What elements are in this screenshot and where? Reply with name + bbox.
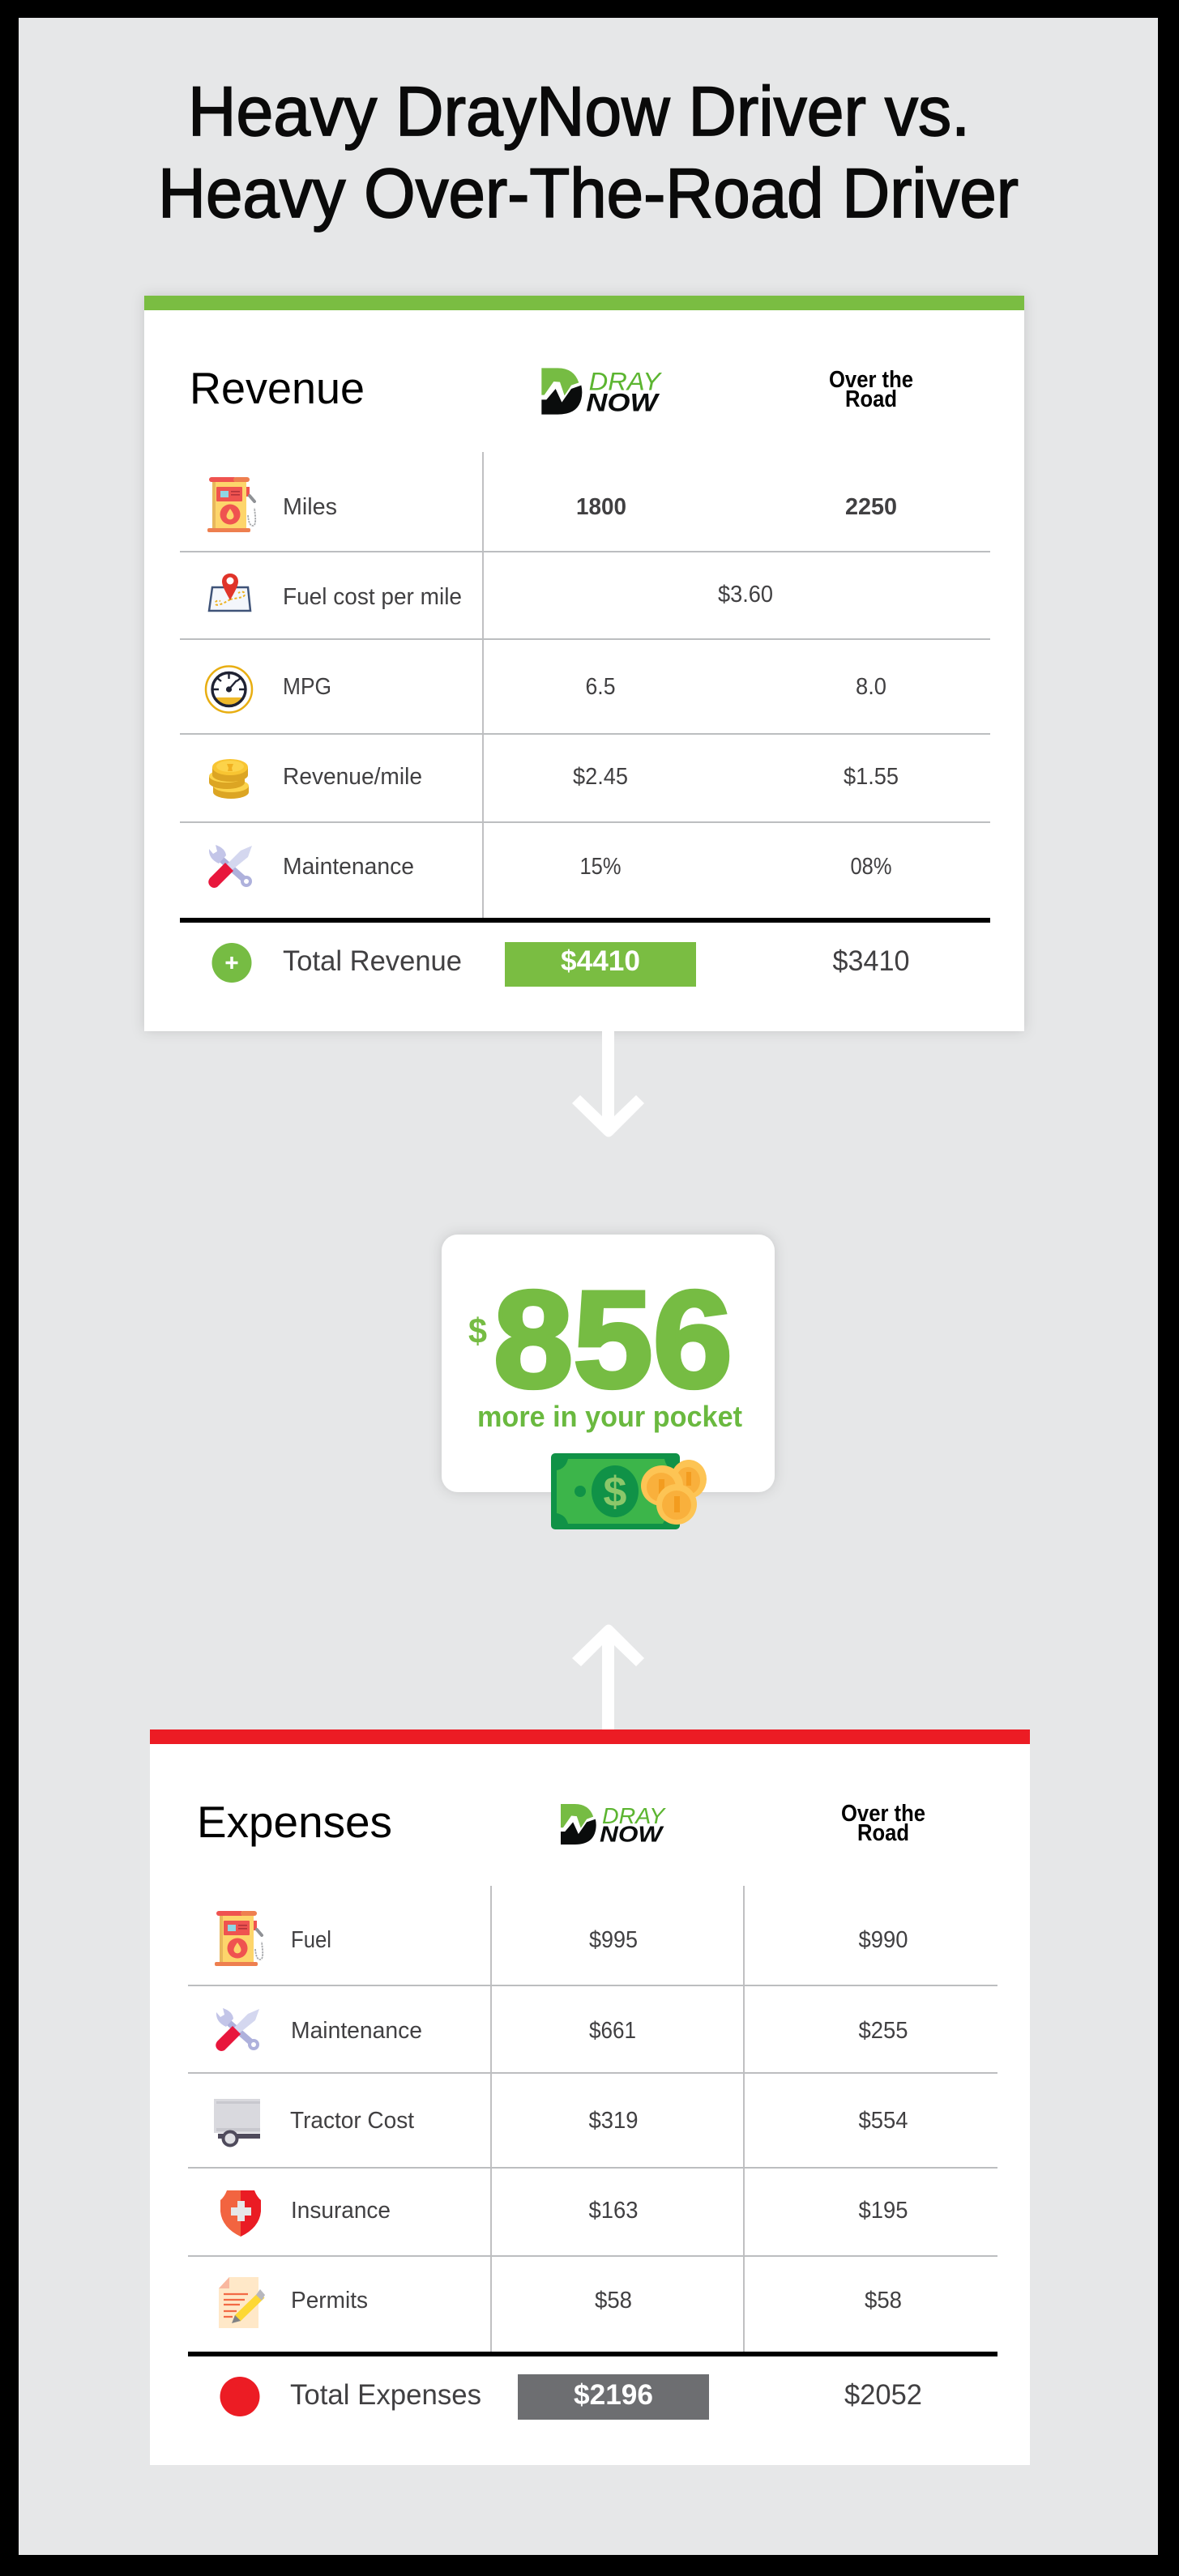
row: Miles: Miles <box>283 494 337 520</box>
icon: banknote and coins: $ <box>604 1469 627 1516</box>
number: 856: 856 <box>493 1263 733 1417</box>
column heading: Over the Road <box>841 1801 925 1846</box>
dollar sign: $ <box>468 1311 487 1351</box>
row: Tractor Cost: Tractor Cost <box>290 2108 414 2134</box>
row: Permits: Permits <box>291 2288 368 2314</box>
column heading: Over the Road: Road <box>857 1820 909 1846</box>
total revenue row: Total Revenue <box>283 945 462 977</box>
total revenue row: $3410 <box>833 945 909 977</box>
row: Maintenance: 08% <box>851 854 891 880</box>
row: Revenue/mile: Revenue/mile <box>283 764 422 790</box>
row: Fuel cost per mile <box>283 582 773 610</box>
total expenses row: $2196 <box>574 2379 653 2411</box>
row: Miles: 1800 <box>576 494 626 520</box>
panel: revenue <box>144 296 1024 1031</box>
row: Insurance: $163 <box>588 2198 639 2224</box>
row: Maintenance: 15% <box>580 854 621 880</box>
red header bar <box>150 1729 1030 1744</box>
caption: more in your pocket <box>477 1400 742 1433</box>
row: Fuel cost per mile: $3.60 <box>718 582 773 608</box>
row: Tractor Cost: $554 <box>859 2108 908 2134</box>
total revenue row <box>283 942 909 987</box>
column heading: Over the Road <box>829 367 913 412</box>
column heading: Over the Road: Over the <box>829 367 913 393</box>
logo: DrayNow: DRAY <box>589 368 662 396</box>
row: Maintenance: Maintenance <box>283 854 414 880</box>
row: Revenue/mile: $1.55 <box>844 764 899 790</box>
row: Fuel: $995 <box>589 1927 638 1953</box>
row: Fuel <box>291 1927 908 1953</box>
icon: coins <box>209 759 249 799</box>
row: Tractor Cost <box>290 2108 908 2134</box>
row: Permits: $58 <box>595 2288 632 2314</box>
arrow: down <box>572 1031 644 1137</box>
row: Maintenance: Maintenance <box>291 2018 422 2044</box>
heading: Expenses: Expenses <box>197 1797 392 1847</box>
logo: DrayNow <box>541 368 662 416</box>
title: Heavy Over-The-Road Driver <box>158 155 1019 232</box>
row: Insurance: Insurance <box>291 2198 391 2224</box>
row: Tractor Cost: $319 <box>588 2108 639 2134</box>
row: Miles: 2250 <box>845 494 897 520</box>
logo: DrayNow: DRAY <box>602 1803 666 1828</box>
column heading: Over the Road: Over the <box>841 1801 925 1827</box>
row: Fuel cost per mile: Fuel cost per mile <box>283 584 462 610</box>
row: MPG <box>283 674 886 700</box>
icon: fuel pump <box>207 477 255 532</box>
icon: tools <box>216 2008 259 2051</box>
row: Permits: $58 <box>865 2288 902 2314</box>
row: Maintenance: $661 <box>589 2018 636 2044</box>
column heading: Over the Road: Road <box>845 386 897 412</box>
row: Insurance <box>291 2198 908 2224</box>
row: Fuel: $990 <box>859 1927 908 1953</box>
row: Revenue/mile: $2.45 <box>573 764 628 790</box>
row: Revenue/mile <box>283 764 899 790</box>
row: MPG: 6.5 <box>585 674 616 700</box>
logo: DrayNow: NOW <box>586 388 660 416</box>
total expenses row: Total Expenses <box>290 2379 481 2411</box>
total expenses row <box>290 2374 922 2420</box>
row: MPG: 8.0 <box>856 674 886 700</box>
title <box>158 73 1019 232</box>
icon: gauge <box>206 666 252 713</box>
icon: shield <box>220 2190 261 2237</box>
icon: tools <box>208 845 252 888</box>
total revenue row: $4410 <box>561 945 640 977</box>
logo: DrayNow: NOW <box>600 1821 664 1846</box>
row: Maintenance: $255 <box>859 2018 908 2044</box>
green header bar <box>144 296 1024 310</box>
icon: banknote and coins <box>551 1453 707 1529</box>
arrow: up <box>572 1625 644 1729</box>
icon: permit document <box>219 2277 265 2328</box>
row: Fuel: Fuel <box>291 1927 331 1953</box>
icon: red circle <box>220 2377 259 2416</box>
icon: plus circle <box>212 943 251 983</box>
panel: expenses <box>150 1729 1030 2465</box>
row: Insurance: $195 <box>859 2198 908 2224</box>
title: Heavy DrayNow Driver vs. <box>188 73 970 151</box>
icon: map pin <box>209 574 250 611</box>
row: Maintenance <box>283 854 891 880</box>
row: Miles <box>283 494 897 520</box>
row: Maintenance <box>291 2018 908 2044</box>
logo: DrayNow <box>561 1803 666 1846</box>
row: Permits <box>291 2288 902 2314</box>
callout: savings <box>442 1235 775 1529</box>
heading: Revenue: Revenue <box>190 363 365 413</box>
total expenses row: $2052 <box>844 2379 922 2411</box>
icon: fuel pump <box>215 1911 263 1966</box>
icon: trailer <box>214 2099 260 2145</box>
row: MPG: MPG <box>283 674 331 700</box>
